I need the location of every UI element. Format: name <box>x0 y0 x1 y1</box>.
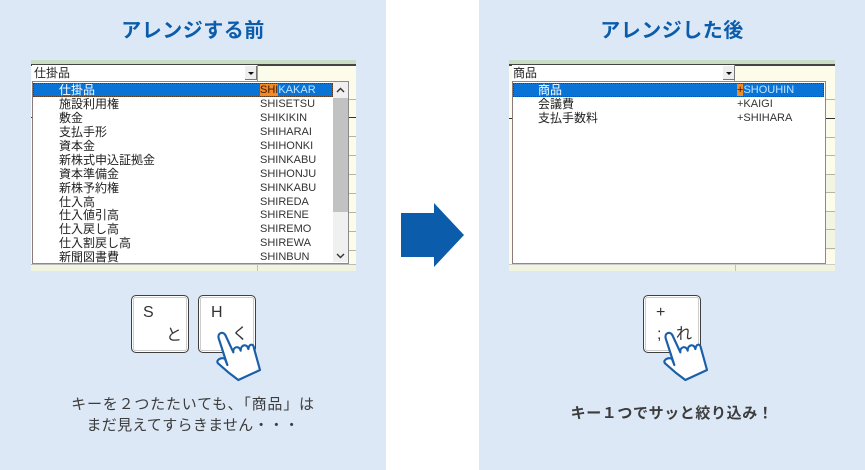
combo field: 仕掛品 <box>34 66 70 80</box>
caption: before <box>71 396 315 434</box>
panel: after arrangement <box>479 0 865 470</box>
dropdown list: 資本金 <box>59 139 95 153</box>
dropdown list <box>512 81 826 264</box>
dropdown list: 施設利用権 <box>59 97 119 111</box>
combo field <box>32 65 258 81</box>
dropdown list: SHIHARAI <box>260 126 312 138</box>
screenshot: dropdown list before <box>31 60 356 271</box>
dropdown list: 仕入高 <box>59 195 95 209</box>
key: plus / re: + <box>656 304 665 321</box>
dropdown list: 新株式申込証拠金 <box>59 153 155 167</box>
dropdown list: +SHOUHIN <box>737 84 794 96</box>
dropdown list: SHIRENE <box>260 209 309 221</box>
key: plus / re: れ <box>676 326 692 343</box>
dropdown list: 新聞図書費 <box>59 250 119 264</box>
caption: after: キー１つでサッと絞り込み！ <box>571 405 773 422</box>
combo field <box>512 65 735 81</box>
dropdown list: 仕入戻し高 <box>59 222 119 236</box>
dropdown list: 会議費 <box>538 97 574 111</box>
dropdown list: 仕掛品 <box>59 83 95 97</box>
key: S: と <box>166 327 182 344</box>
key: plus / re: ; <box>657 326 661 343</box>
caption: before: まだ見えてすらきません・・・ <box>86 417 300 434</box>
heading: before: アレンジする前 <box>121 20 265 42</box>
panel: before arrangement <box>0 0 386 470</box>
scrollbar <box>333 82 348 262</box>
dropdown list: 新株予約権 <box>59 181 119 195</box>
dropdown list: SHIREDA <box>260 196 309 208</box>
icon: pointing hand on key <box>663 332 708 382</box>
key: H <box>198 295 256 353</box>
dropdown list: SHIREWA <box>260 237 311 249</box>
selected row <box>33 83 333 97</box>
dropdown list: SHISETSU <box>260 98 315 110</box>
icon: pointing hand on H key <box>216 332 262 382</box>
dropdown list: 仕入割戻し高 <box>59 236 131 250</box>
dropdown list: SHINKABU <box>260 154 316 166</box>
dropdown list: 商品 <box>538 83 562 97</box>
dropdown list: 支払手形 <box>59 125 107 139</box>
caption: before: キーを２つたたいても、「商品」は <box>71 396 315 413</box>
dropdown list: SHINBUN <box>260 251 310 263</box>
dropdown list: SHIREMO <box>260 223 311 235</box>
dropdown list: SHIHONKI <box>260 140 313 152</box>
dropdown list: +KAIGI <box>737 98 773 110</box>
dropdown list: SHIKIKIN <box>260 112 307 124</box>
dropdown list: SHIKAKAR <box>260 84 316 96</box>
dropdown list: +SHIHARA <box>737 112 792 124</box>
screenshot: dropdown list after <box>509 60 835 271</box>
key: plus / re <box>643 295 701 353</box>
combo field: 商品 <box>513 66 537 80</box>
key: H: く <box>232 326 248 343</box>
key: S: S <box>143 304 154 321</box>
arrow: before to after <box>401 203 464 267</box>
heading: after: アレンジした後 <box>600 20 744 42</box>
dropdown list: SHIHONJU <box>260 168 316 180</box>
dropdown list: SHINKABU <box>260 182 316 194</box>
selected row <box>513 83 824 97</box>
key: H: H <box>211 304 223 321</box>
dropdown list: 資本準備金 <box>59 167 119 181</box>
dropdown list: 敷金 <box>59 111 83 125</box>
dropdown list: 支払手数料 <box>538 111 598 125</box>
dropdown list: 仕入値引高 <box>59 208 119 222</box>
key: S <box>131 295 189 353</box>
dropdown list <box>32 81 349 264</box>
